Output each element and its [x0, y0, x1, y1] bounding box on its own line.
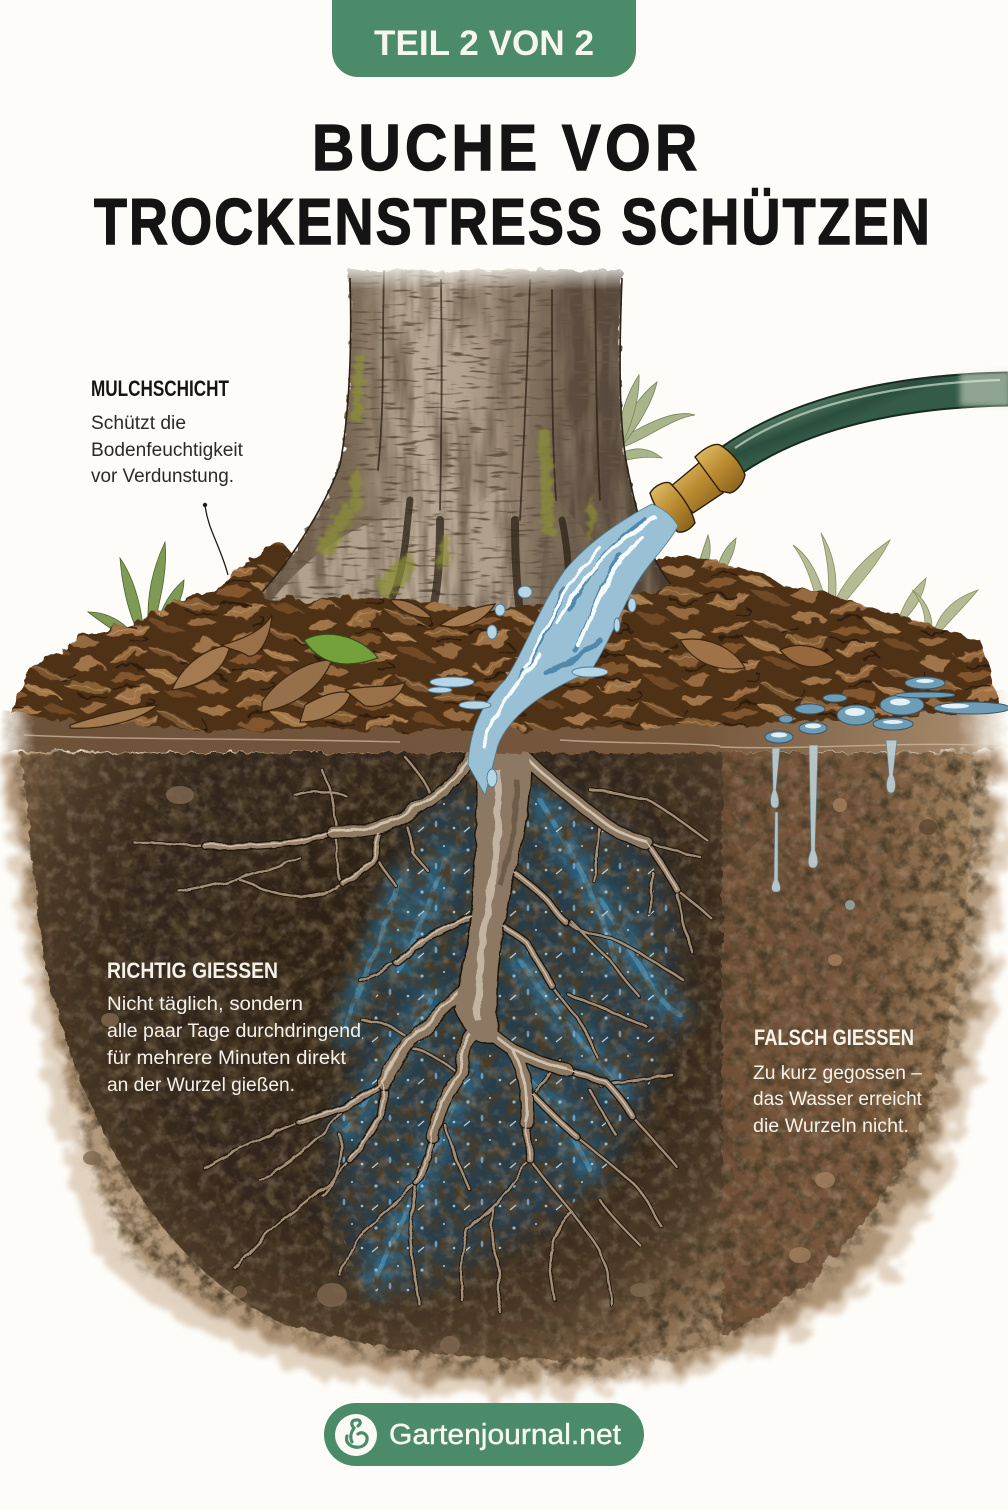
badge text: TEIL 2 VON 2 — [374, 24, 594, 63]
wrong heading: FALSCH GIESSEN — [754, 1025, 914, 1050]
mulch heading: MULCHSCHICHT — [91, 376, 229, 401]
footer text: Gartenjournal.net — [389, 1419, 621, 1451]
correct text: Nicht täglich, sondern — [107, 994, 303, 1015]
puddles — [765, 677, 1008, 743]
trunk outline — [262, 278, 688, 602]
mulch behind trunk — [200, 545, 790, 630]
splash — [428, 586, 636, 787]
moss — [315, 355, 598, 600]
mulch text — [91, 413, 244, 487]
soil pale halo — [0, 750, 1008, 1398]
water in soil — [336, 791, 680, 1300]
surface strip — [0, 690, 1008, 753]
soil cross-section — [0, 745, 1008, 1405]
wrong text — [753, 1063, 923, 1137]
leaves on mulch — [70, 600, 835, 728]
soil mid ring — [8, 752, 996, 1382]
shallow puddle and drips — [765, 677, 1008, 892]
mulch mound — [10, 581, 1000, 730]
dry soil right — [722, 753, 972, 1335]
correct heading: RICHTIG GIESSEN — [107, 958, 278, 983]
title: TROCKENSTRESS SCHÜTZEN — [94, 185, 930, 258]
trunk — [255, 264, 700, 615]
title: BUCHE VOR — [312, 112, 697, 185]
pebbles — [83, 786, 937, 1354]
footer badge — [324, 1403, 644, 1466]
top badge — [332, 0, 636, 77]
water stream — [428, 504, 678, 795]
root flares — [272, 488, 514, 612]
correct text — [107, 994, 361, 1096]
callout: wrong watering — [753, 1025, 923, 1137]
soil grain — [0, 745, 1008, 1405]
mulch text: vor Verdunstung. — [91, 466, 234, 487]
trunk top fade — [340, 264, 632, 290]
surface strip light lines — [24, 735, 975, 748]
mulch text: Schützt die — [91, 413, 186, 434]
wrong text: das Wasser erreicht — [753, 1089, 923, 1110]
callout: correct watering — [107, 958, 361, 1096]
grass tufts — [88, 375, 978, 642]
wrong text: die Wurzeln nicht. — [753, 1116, 909, 1137]
water droplets — [336, 791, 674, 1300]
hose nozzle — [650, 444, 745, 532]
leader dot — [203, 503, 207, 507]
roots — [135, 742, 710, 1310]
logo icon — [335, 1414, 377, 1456]
drips — [771, 740, 897, 892]
wet dark soil left — [20, 753, 722, 1360]
green leaf — [304, 634, 378, 664]
callout: mulch — [91, 376, 244, 575]
correct text: für mehrere Minuten direkt — [107, 1048, 347, 1069]
title — [94, 112, 930, 258]
hose — [650, 370, 1008, 532]
wrong text: Zu kurz gegossen – — [753, 1063, 922, 1084]
leader line — [205, 505, 228, 575]
correct text: alle paar Tage durchdringend — [107, 1021, 361, 1042]
mulch text: Bodenfeuchtigkeit — [91, 440, 244, 461]
correct text: an der Wurzel gießen. — [107, 1075, 295, 1096]
